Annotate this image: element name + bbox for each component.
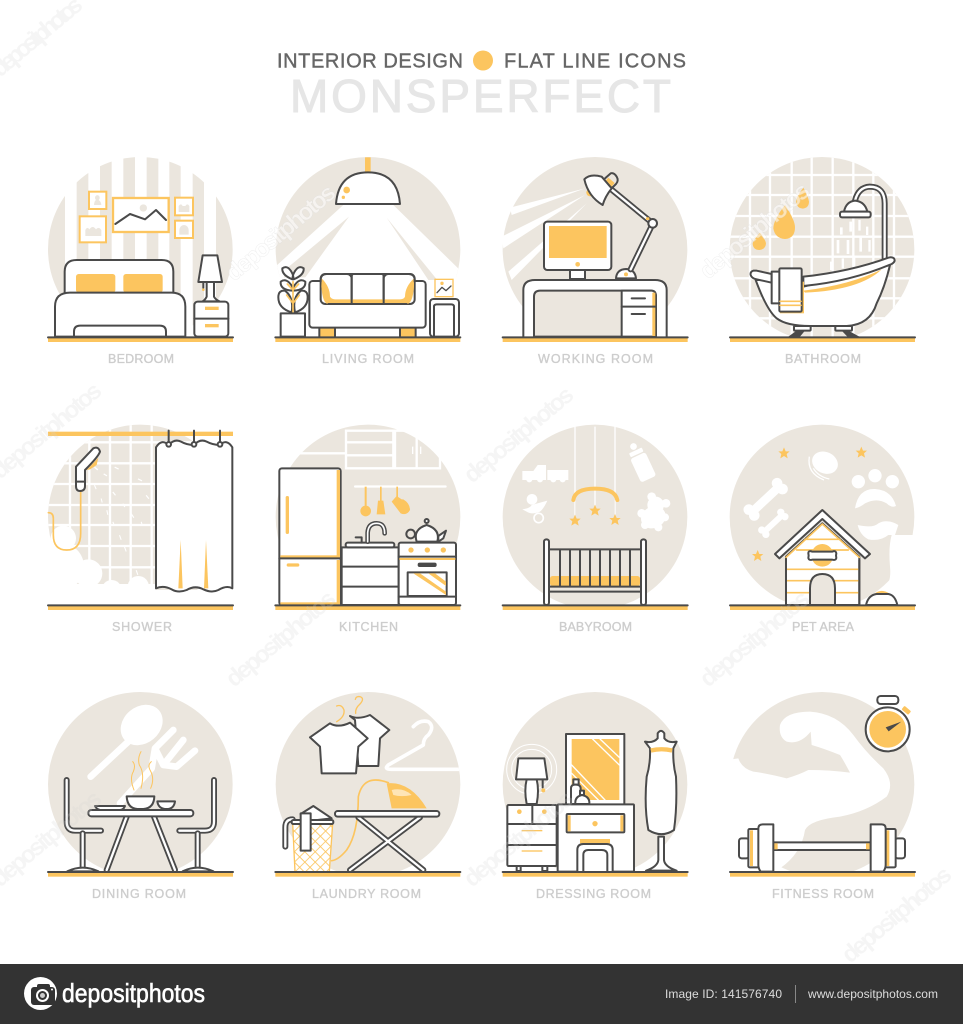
label: bedroom: BEDROOM (108, 352, 174, 366)
label: babyroom: BABYROOM (559, 620, 632, 634)
icon: dressing room (500, 692, 690, 883)
label: dressing room: DRESSING ROOM (536, 887, 651, 901)
icon: bathroom (728, 157, 917, 342)
icon: pet area (723, 425, 920, 613)
icon: shower (36, 423, 235, 610)
label: kitchen: KITCHEN (339, 620, 398, 634)
footer bar (0, 964, 963, 1024)
icon: fitness room (723, 692, 920, 883)
icon: working room (500, 157, 690, 346)
label: fitness room: FITNESS ROOM (772, 887, 874, 901)
icon: bedroom (48, 157, 233, 342)
watermark text: depositphotos (221, 585, 341, 693)
label: living room: LIVING ROOM (322, 352, 414, 366)
panel: living room (272, 157, 463, 366)
image id: Image ID: 141576740 (665, 987, 782, 1001)
title: flat line icons: FLAT LINE ICONS (504, 50, 686, 72)
icon: title yellow dot (473, 50, 493, 70)
panel: dining room (43, 692, 237, 901)
panel: bathroom (728, 157, 917, 366)
panel: babyroom (500, 425, 690, 634)
panel: fitness room (723, 692, 920, 901)
label: laundry room: LAUNDRY ROOM (312, 887, 421, 901)
label: shower: SHOWER (112, 620, 172, 634)
subtitle: monsperfect: MONSPERFECT (290, 70, 671, 122)
panel: pet area (723, 425, 920, 634)
watermark text: depositphotos (459, 785, 579, 893)
panel: shower (36, 423, 235, 634)
panel: working room (500, 157, 690, 366)
watermark text: depositphotos (695, 177, 815, 285)
label: working room: WORKING ROOM (538, 352, 653, 366)
watermark text: depositphotos (837, 861, 957, 969)
website url: www.depositphotos.com (807, 987, 938, 1001)
panel: bedroom (48, 157, 233, 366)
panel: kitchen (273, 423, 463, 634)
footer brand name: depositphotos (62, 978, 205, 1008)
label: pet area: PET AREA (792, 620, 855, 634)
watermark text: depositphotos (459, 381, 579, 489)
label: bathroom: BATHROOM (785, 352, 861, 366)
watermark text: depositphotos (695, 585, 815, 693)
icon: babyroom (500, 425, 690, 613)
label: dining room: DINING ROOM (92, 887, 186, 901)
panel: laundry room (273, 692, 467, 901)
panel: dressing room (500, 692, 690, 901)
icon: living room (272, 157, 463, 347)
icon: kitchen (273, 423, 463, 610)
title: interior design: INTERIOR DESIGN (277, 50, 463, 72)
icon: dining room (43, 692, 237, 883)
icon: depositphotos logo (24, 977, 57, 1010)
icon: laundry room (273, 692, 467, 883)
watermark text: depositphotos (221, 179, 341, 287)
